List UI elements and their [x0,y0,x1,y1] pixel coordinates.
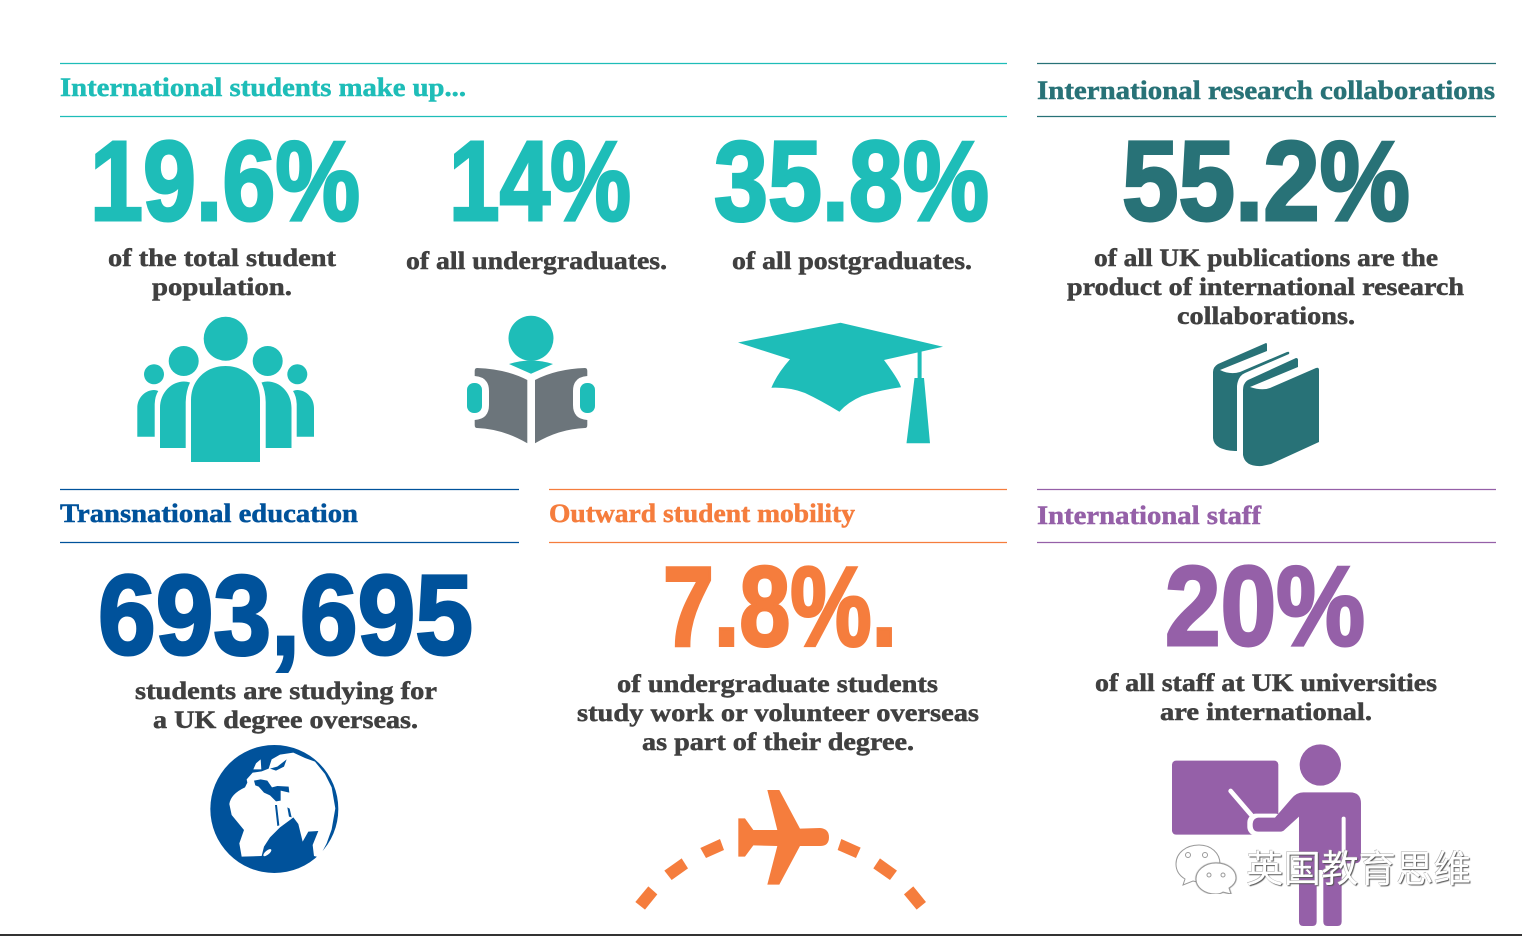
text: students studying for a UK degree overseas [135,676,437,734]
text: of undergraduate students: of undergraduate students [617,669,938,698]
panel: outward student mobility [577,544,979,910]
number: 7.8%.: 7.8%. [663,544,897,670]
text: of all UK publications [1067,243,1464,330]
panel: international staff [1095,543,1437,926]
number: 55.2%: 55.2% [1122,118,1410,244]
watermark: WeChat logo and account name: 英国教育思维 [1246,838,1471,893]
number: 20%: 20% [1165,543,1365,669]
text: of undergraduate students [577,669,979,756]
panel: total student population [90,118,360,462]
text: of all undergraduates: of all undergraduates. [406,246,667,275]
number: 14%: 14% [449,118,631,244]
text: students studying for a UK degree overseas: students are studying for [135,676,437,705]
number: 693,695: 693,695 [98,552,473,678]
heading: International staff: International staff [1037,501,1261,530]
bottom border [0,934,1522,936]
heading: Outward student mobility: Outward student mobility [549,499,855,528]
text: of all postgraduates: of all postgraduates. [732,246,972,275]
heading: International research collaborations: International research collaborations [1037,76,1495,105]
panel: undergraduates [406,118,667,443]
text: of the total student population [108,243,337,301]
text: of undergraduate students: as part of their degree. [642,727,914,756]
number: 19.6%: 19.6% [90,118,360,244]
icon: group of people [137,317,314,462]
panel: transnational education [98,552,473,873]
number: 35.8%: 35.8% [714,118,989,244]
text: of all UK publications: product of international research [1067,272,1464,301]
icon: books [1213,343,1319,466]
heading: Transnational education: Transnational education [60,499,359,528]
icon: graduation cap [738,323,943,443]
text: of all staff at UK universities [1095,668,1437,726]
text: of all UK publications: collaborations. [1177,301,1355,330]
panel: postgraduates [714,118,989,443]
text: of the total student population: of the total student [108,243,337,272]
icon: globe [210,745,338,873]
text: students studying for a UK degree overseas: a UK degree overseas. [153,705,418,734]
text: of the total student population: population. [152,272,292,301]
icon: plane with dashed flight path [635,790,926,910]
text: of all staff at UK universities: are international. [1160,697,1372,726]
text: of all UK publications: of all UK publications are the [1094,243,1438,272]
icon: person reading a book [467,316,595,443]
text: of all staff at UK universities: of all staff at UK universities [1095,668,1437,697]
heading: International students make up: International students make up... [60,73,466,102]
icon: teacher at board [1172,744,1361,926]
panel: research collaborations [1067,118,1464,466]
text: of undergraduate students: study work or volunteer overseas [577,698,979,727]
